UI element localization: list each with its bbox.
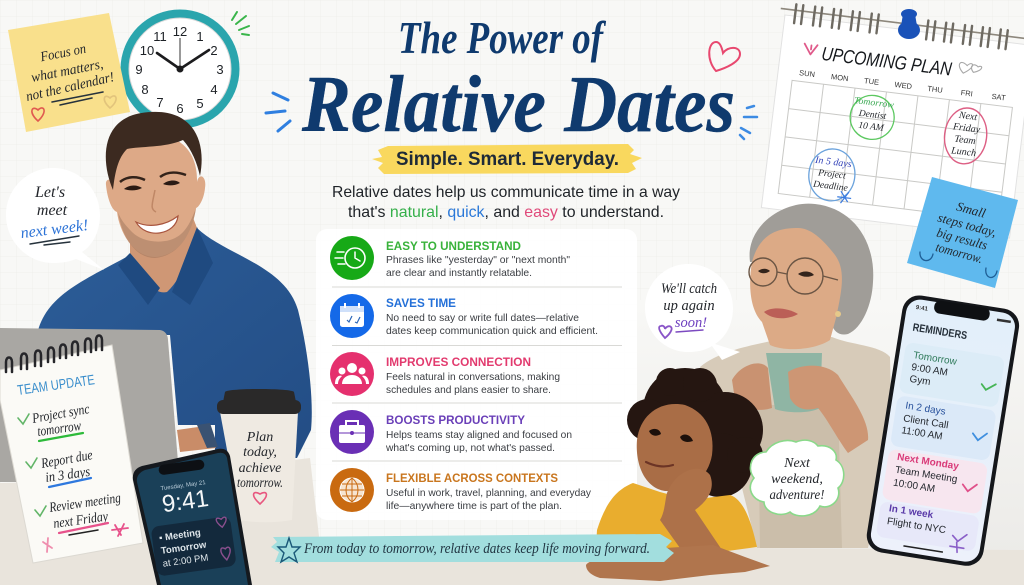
sticky note: focus [8, 13, 130, 132]
desk surface [0, 458, 1024, 585]
calendar: upcoming plan [756, 2, 1024, 238]
sticky note: small steps: tomorrow. [934, 239, 984, 266]
icon: pink heart [709, 42, 740, 71]
intro text: that's natural, quick, and easy to understand. [348, 204, 664, 221]
lock screen content [142, 457, 237, 577]
child hand and arm [660, 469, 722, 562]
cloud bubble: next weekend: weekend, [771, 472, 823, 487]
calendar heading: UPCOMING PLAN [820, 44, 953, 81]
man smile [136, 216, 178, 233]
icon: globe [330, 468, 374, 512]
icon: clock speed [330, 236, 374, 280]
speech bubble: catch up: up again [663, 298, 715, 314]
benefit: flexible across contexts: life—anywhere time is part of the plan. [386, 501, 562, 512]
wall clock [120, 10, 240, 128]
icon: green sparkle [232, 12, 249, 35]
lock screen notification: at 2:00 PM [162, 552, 209, 570]
benefit: improves connection [330, 352, 560, 396]
calendar entry: in 5 days: Deadline [812, 180, 848, 194]
cloud bubble: next weekend: Next [783, 456, 811, 471]
child hair [627, 368, 763, 497]
calendar spiral binding [779, 2, 1024, 53]
sticky note: focus: not the calendar! [25, 70, 116, 105]
speech bubble: next week [6, 168, 104, 270]
man forearm and watch [177, 423, 218, 452]
lock screen notification: ▪ Meeting [158, 527, 202, 544]
coffee cup [217, 389, 301, 522]
child eyes and mouth [649, 429, 693, 442]
benefit: saves time: SAVES TIME [386, 296, 456, 310]
calendar weekdays: MON [831, 72, 849, 83]
calendar entry: next friday [941, 106, 990, 166]
grandmother cardigan [700, 337, 892, 548]
reminder: client call [890, 395, 997, 461]
man eyes [124, 180, 180, 190]
benefit: saves time: No need to say or write full dates—relative [386, 313, 579, 324]
calendar entry: next friday: Next [957, 110, 978, 123]
clock hands [157, 38, 209, 72]
notebook item: report due: in 3 days [44, 465, 92, 486]
benefit: boosts productivity [330, 410, 572, 454]
reminder: flight: In 1 week [888, 503, 934, 521]
icon: blue push pin [898, 9, 920, 39]
speech bubble: catch up: We'll catch [661, 281, 717, 297]
calendar entry: tomorrow dentist [848, 93, 897, 142]
calendar grid [778, 80, 1012, 221]
clock numbers [135, 24, 224, 116]
grandmother neck and face [750, 228, 842, 349]
clock numbers: 11 [153, 29, 167, 44]
calendar entry: tomorrow dentist: 10 AM [858, 121, 885, 134]
cloud bubble: next weekend [750, 440, 844, 516]
icon: people [330, 352, 374, 396]
calendar entry: next friday: Team [954, 134, 976, 147]
child shirt [595, 483, 757, 562]
benefit: saves time [330, 294, 598, 338]
benefit: boosts productivity: what's coming up, not what's passed. [385, 443, 555, 454]
notebook item: review meeting [35, 491, 128, 552]
reminder: tomorrow gym [898, 342, 1005, 408]
calendar weekdays: WED [894, 80, 913, 91]
benefit: easy to understand: EASY TO UNDERSTAND [386, 239, 521, 253]
man [37, 112, 312, 458]
lock screen notification: Tomorrow [160, 540, 208, 557]
notebook item: project sync: Project sync [30, 402, 91, 427]
reminder: client call: 11:00 AM [901, 425, 943, 443]
icon: calendar [330, 294, 374, 338]
benefit: boosts productivity: BOOSTS PRODUCTIVITY [386, 413, 525, 427]
grandmother eyes and mouth [758, 269, 814, 277]
calendar entry: tomorrow dentist: Tomorrow [853, 96, 895, 111]
notebook item: report due [26, 448, 94, 487]
clock numbers: 12 [173, 24, 187, 39]
man hair [106, 112, 202, 190]
clock numbers: 1 [196, 29, 204, 44]
child [586, 368, 770, 581]
benefit: improves connection: Feels natural in conversations, making [386, 372, 560, 383]
reminder: tomorrow gym: Tomorrow [912, 350, 958, 368]
icon: purple heart [659, 326, 672, 338]
clock numbers: 3 [216, 62, 224, 77]
notebook item: project sync: tomorrow [36, 419, 83, 440]
banner: closing message [271, 534, 674, 562]
cloud bubble: next weekend: adventure! [770, 488, 825, 503]
coffee cup: today, [243, 445, 277, 460]
sticky note: small steps: big results [935, 225, 989, 253]
benefit: flexible across contexts: FLEXIBLE ACROSS CONTEXTS [386, 471, 558, 485]
reminders heading: REMINDERS [912, 322, 968, 342]
phone: lock screen [133, 449, 252, 585]
man stubble [118, 208, 196, 258]
reminder: client call: In 2 days [904, 401, 946, 418]
panel: benefits [316, 229, 637, 520]
calendar weekdays: THU [927, 84, 943, 95]
clock numbers: 2 [210, 43, 218, 58]
panel dividers [332, 287, 622, 461]
clock numbers: 5 [196, 96, 204, 111]
grandmother [700, 204, 892, 548]
speech bubble: next week: meet [37, 202, 68, 219]
benefit: saves time: dates keep communication quick and efficient. [386, 326, 598, 337]
clock numbers: 10 [140, 43, 154, 58]
reminder: tomorrow gym: 9:00 AM [911, 362, 949, 379]
notebook item: report due: Report due [39, 448, 94, 472]
reminder: team meeting: 10:00 AM [892, 478, 936, 495]
notebook heading: TEAM UPDATE [16, 371, 96, 398]
icon: coffee heart [254, 493, 266, 504]
calendar weekdays: TUE [864, 76, 880, 87]
man shirt [37, 228, 312, 458]
notebook item: review meeting: Review meeting [48, 491, 122, 516]
calendar entry: next friday: Friday [951, 121, 981, 136]
speech bubble: next week: Let's [34, 184, 65, 201]
icon: blue accent right [740, 106, 757, 139]
calendar weekdays: FRI [960, 88, 973, 98]
grandmother hands [732, 363, 772, 410]
notebook rings [6, 336, 102, 372]
laptop [0, 328, 178, 482]
lock screen notification [151, 516, 237, 577]
intro text [332, 184, 680, 221]
calendar entry: tomorrow dentist: Dentist [857, 109, 887, 122]
grandmother mug [766, 353, 822, 412]
banner: closing message: From today to tomorrow, relative dates keep life moving forward. [303, 541, 650, 557]
reminder: flight [875, 501, 980, 555]
icon: star [278, 538, 300, 562]
grandmother glasses [749, 258, 838, 294]
intro text: Relative dates help us communicate time in a way [332, 184, 680, 201]
man collar [118, 227, 213, 305]
reminder: tomorrow gym: Gym [909, 374, 931, 388]
man face [106, 135, 205, 257]
lock screen content: Tuesday, May 21 [160, 480, 207, 492]
benefit: easy to understand: are clear and instantly relatable. [386, 268, 532, 279]
reminder: team meeting [882, 448, 988, 515]
coffee cup: achieve [239, 461, 281, 476]
calendar entry: in 5 days [806, 146, 858, 205]
reminder: client call: Client Call [902, 413, 949, 431]
clock numbers: 7 [156, 95, 164, 110]
phone: reminders: 9:41 [915, 305, 929, 313]
reminder: team meeting: Next Monday [896, 452, 960, 473]
coffee cup: Plan [246, 430, 273, 445]
coffee cup: tomorrow. [237, 476, 283, 491]
clock numbers: 9 [135, 62, 143, 77]
title: the power of: The Power of [398, 12, 607, 63]
clock numbers: 6 [176, 101, 184, 116]
calendar weekdays: SAT [991, 92, 1007, 103]
grandmother hair [750, 204, 873, 335]
benefit: flexible across contexts: Useful in work, travel, planning, and everyday [386, 488, 592, 499]
sticky note: focus: what matters, [30, 57, 105, 86]
calendar weekdays: SUN [799, 68, 815, 79]
reminder: team meeting: Team Meeting [894, 465, 958, 485]
calendar weekdays [799, 68, 1007, 103]
man neck [130, 215, 197, 292]
phone: reminders [864, 293, 1022, 568]
benefit: improves connection: IMPROVES CONNECTION [386, 355, 531, 369]
calendar entry: in 5 days: In 5 days [814, 155, 852, 170]
clock numbers: 4 [210, 82, 218, 97]
sticky note: small steps [907, 177, 1018, 288]
title: relative dates: Relative Dates [301, 61, 735, 149]
sticky note: small steps: Small [955, 199, 988, 221]
lock screen content: 9:41 [160, 485, 210, 518]
reminder: flight: Flight to NYC [886, 516, 947, 536]
notebook item: review meeting: next Friday [52, 509, 110, 532]
speech bubble: next week: next week! [20, 217, 89, 242]
icon: blue accent left [266, 93, 290, 131]
benefit: boosts productivity: Helps teams stay aligned and focused on [386, 430, 572, 441]
calendar entry: next friday: Lunch [950, 145, 977, 159]
benefit: flexible across contexts [330, 468, 592, 512]
benefit: improves connection: schedules and plans easier to share. [386, 385, 551, 396]
child face [637, 404, 713, 491]
tagline: Simple. Smart. Everyday. [396, 149, 619, 170]
tagline [372, 144, 642, 174]
notebook: team update [0, 336, 143, 563]
speech bubble: catch up [645, 264, 740, 360]
clock numbers: 8 [141, 82, 149, 97]
icon: briefcase [330, 410, 374, 454]
calendar entry: in 5 days: Project [817, 168, 847, 182]
notebook item: project sync [18, 402, 91, 441]
sticky note: focus: Focus on [38, 42, 87, 65]
benefit: easy to understand [330, 236, 570, 280]
sticky note: small steps: steps today, [936, 210, 998, 240]
benefit: easy to understand: Phrases like "yesterday" or "next month" [386, 255, 570, 266]
speech bubble: catch up: soon! [675, 315, 707, 331]
